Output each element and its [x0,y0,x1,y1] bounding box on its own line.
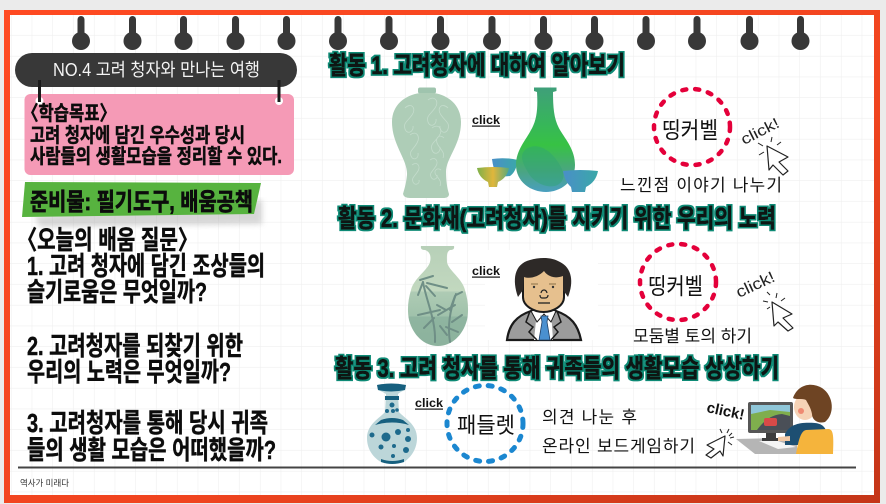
panel: learning goal: 고려 청자에 담긴 우수성과 당시 [30,124,245,147]
today's questions: 〈오늘의 배움 질문〉 [17,225,198,255]
today's questions: 1. 고려 청자에 담긴 조상들의 [27,251,265,281]
icon: blue and white vase [367,384,417,464]
today's questions: 들의 생활 모습은 어떠했을까? [27,435,276,465]
callout: Padlet circle: 패들렛 [457,413,515,438]
today's questions [17,225,276,465]
callout: Padlet circle [447,386,523,462]
text: group discussion: 모둠별 토의 하기 [633,327,752,346]
heading: activity 3: 활동 3. 고려 청자를 통해 귀족들의 생활모습 상상하기 [335,355,779,383]
callout: Thinkerbell circle 2 [640,244,716,320]
today's questions: 슬기로움은 무엇일까? [27,277,207,307]
panel: learning goal: 사람들의 생활모습을 정리할 수 있다. [30,145,282,168]
icon: click cursor 1: click! [738,115,782,149]
label: click: click [472,113,500,127]
text: online board game instructions: 온라인 보드게임하기 [542,437,695,456]
callout: Thinkerbell circle 1 [654,89,730,165]
materials banner: 준비물: 필기도구, 배움공책 [30,189,253,216]
icon: click cursor 3: click! [705,399,746,424]
today's questions: 우리의 노력은 무엇일까? [27,357,231,387]
today's questions: 3. 고려청자를 통해 당시 귀족 [27,408,268,438]
title bar: NO.4 고려 청자와 만나는 여행 [53,60,260,80]
today's questions: 2. 고려청자를 되찾기 위한 [27,331,243,361]
icon: green bottle and cups [477,88,598,192]
text: online board game instructions: 의견 나눈 후 [542,408,637,427]
icon: bamboo celadon vase [408,246,468,346]
binder pins [72,16,810,50]
icon: click cursor 2: click! [734,269,778,302]
materials banner [22,182,262,227]
text: online board game instructions [542,408,695,456]
title bar [15,53,297,102]
text: share impressions: 느낀점 이야기 나누기 [620,176,782,195]
icon: click cursor 1 [738,115,788,175]
callout: Thinkerbell circle 2: 띵커벨 [648,273,703,299]
icon: click cursor 2 [734,269,793,331]
label: click: click [472,264,500,278]
label: click: click [415,396,443,410]
icon: click cursor 3 [705,399,746,458]
heading: activity 1: 활동 1. 고려청자에 대하여 알아보기 [329,52,625,80]
panel: learning goal [22,94,294,175]
footer rule and credit: 역사가 미래다 [20,478,69,488]
icon: girl at computer [736,385,833,454]
icon: man in suit [485,250,598,340]
callout: Thinkerbell circle 1: 띵커벨 [662,117,718,143]
heading: activity 2: 활동 2. 문화재(고려청자)를 지키기 위한 우리의 노력 [338,205,776,233]
panel: learning goal: 〈학습목표〉 [22,102,116,125]
icon: celadon maebyeong vase [392,88,461,198]
